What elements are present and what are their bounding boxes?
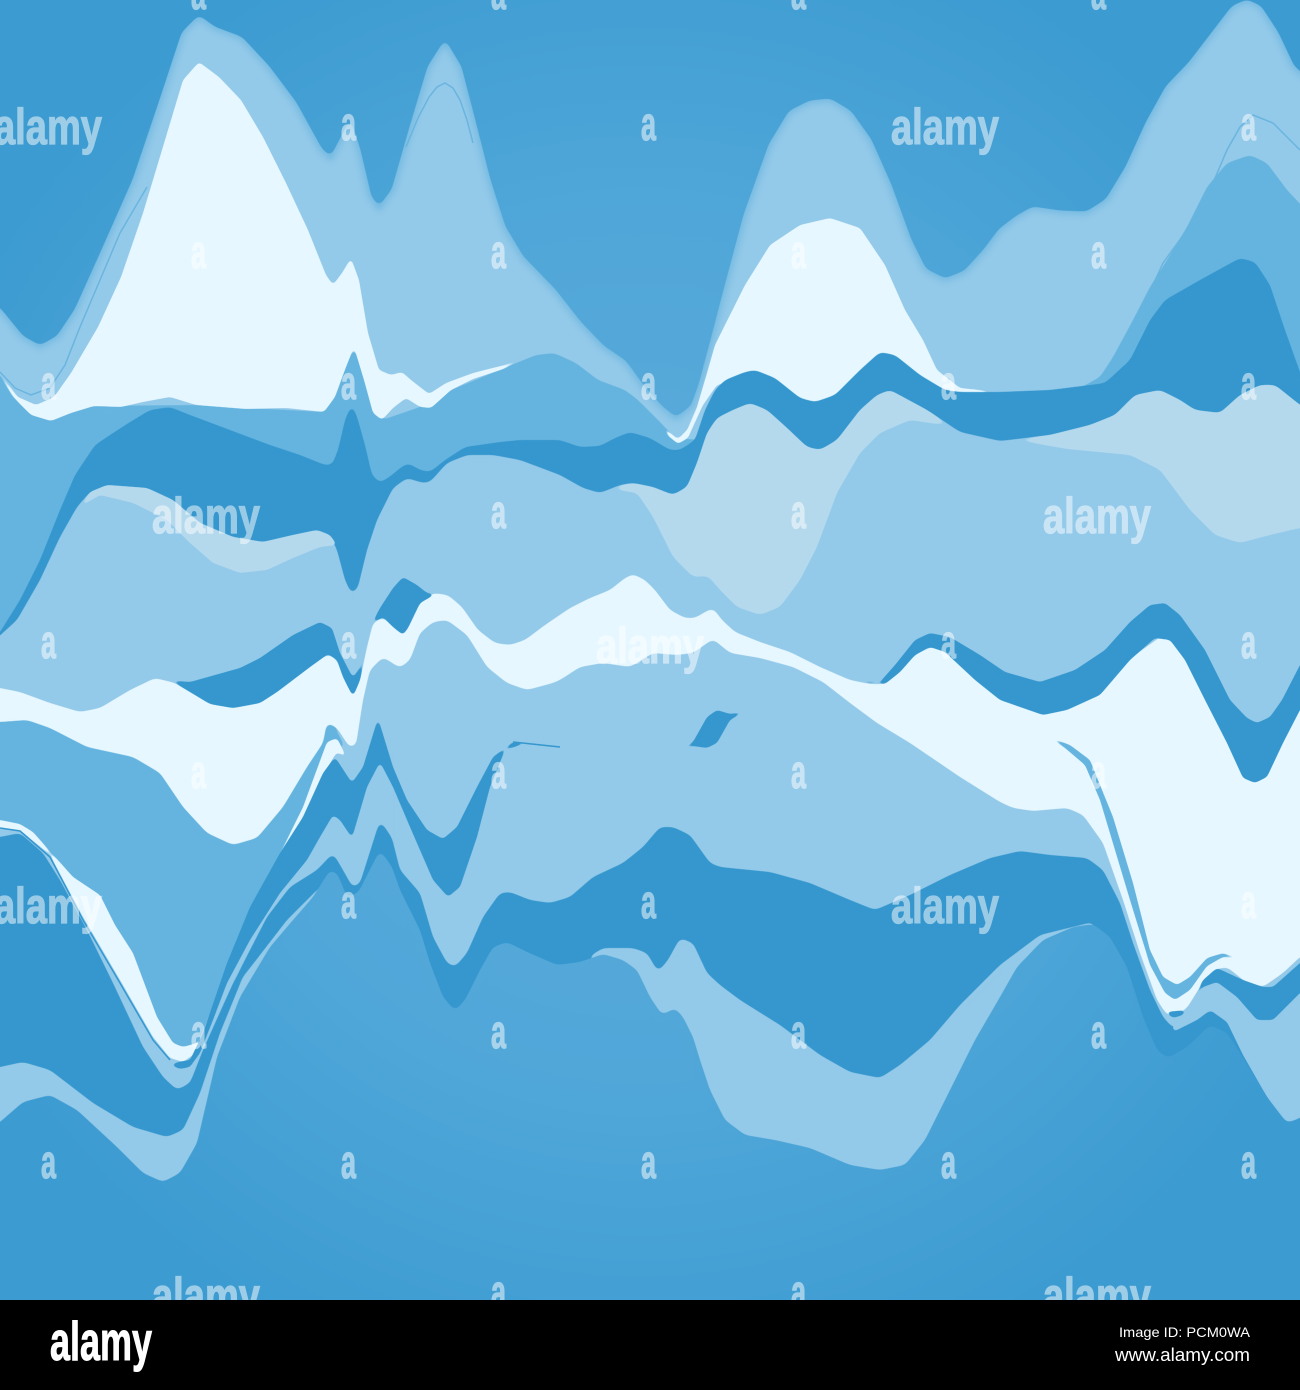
watermark grid: a — [341, 356, 356, 409]
thin white strip lower left — [0, 738, 347, 1062]
watermark grid: a — [191, 225, 206, 278]
watermark grid: a — [641, 875, 656, 928]
watermark grid: a — [491, 1005, 506, 1058]
watermark grid: alamy — [152, 488, 260, 544]
watermark grid: a — [1241, 1135, 1256, 1188]
watermark grid: a — [1091, 745, 1106, 798]
watermark grid: a — [941, 615, 956, 668]
dark diagonal strand — [170, 718, 530, 1069]
watermark grid: a — [641, 97, 656, 150]
watermark grid: a — [341, 875, 356, 928]
watermark grid: a — [791, 485, 806, 538]
light strip lower left — [0, 718, 395, 1200]
watermark grid: alamy — [596, 618, 704, 674]
watermark grid: a — [791, 225, 806, 278]
watermark grid: a — [1241, 615, 1256, 668]
watermark grid: a — [791, 745, 806, 798]
light lobe lower centre — [590, 922, 1110, 1220]
mid blue upper band — [0, 155, 1300, 680]
watermark grid: a — [341, 1135, 356, 1188]
watermark grid: a — [941, 1135, 956, 1188]
watermark grid: a — [941, 356, 956, 409]
watermark grid: a — [1241, 356, 1256, 409]
watermark grid: alamy — [152, 1268, 260, 1324]
watermark grid: alamy — [891, 99, 999, 155]
pale blue lobe right — [610, 385, 1300, 615]
black footer bar — [0, 1300, 1300, 1390]
light lobe lower right — [1173, 975, 1300, 1125]
thin dark lines — [0, 742, 560, 1060]
watermark grid: a — [41, 356, 56, 409]
footer logo: alamy — [50, 1310, 152, 1372]
image id: Image ID: PCM0WA — [1119, 1324, 1251, 1340]
watermark grid: a — [491, 225, 506, 278]
watermark grid: alamy — [891, 878, 999, 934]
watermark grid: a — [641, 356, 656, 409]
upper light wave — [0, 1, 1300, 520]
watermark grid: a — [491, 745, 506, 798]
mid blue lower left area — [0, 700, 350, 1055]
bottom background wave — [0, 850, 1300, 1320]
watermark grid: a — [491, 485, 506, 538]
watermark grid: a — [191, 1005, 206, 1058]
dark ribbon lower right — [1165, 945, 1300, 1020]
watermark grid: a — [341, 97, 356, 150]
watermark grid: a — [641, 1135, 656, 1188]
watermark grid: a — [791, 1005, 806, 1058]
thin contour lines in upper wave — [0, 83, 1300, 395]
watermark grid: alamy — [1043, 488, 1151, 544]
white ribbon — [0, 574, 1300, 1015]
watermark grid: a — [1091, 225, 1106, 278]
watermark grid: a — [1241, 875, 1256, 928]
dark lower wave — [0, 820, 1300, 1230]
dark ribbon right — [815, 603, 1300, 783]
watermark grid: a — [491, 1265, 506, 1318]
watermark grid: a — [41, 1135, 56, 1188]
watermark grid: a — [41, 615, 56, 668]
watermark grid: a — [341, 615, 356, 668]
watermark grid: a — [191, 745, 206, 798]
mid blue strand right — [1045, 735, 1250, 1000]
large light blue middle band — [0, 385, 1300, 1320]
watermark grid: a — [1091, 1005, 1106, 1058]
website: www.alamy.com — [1114, 1345, 1250, 1365]
watermark grid: alamy — [1043, 1268, 1151, 1324]
small dark fleck — [678, 710, 746, 751]
watermark grid: a — [791, 1265, 806, 1318]
dark ribbon left — [165, 577, 436, 708]
white peak right — [645, 218, 1000, 444]
watermark grid: a — [1241, 97, 1256, 150]
dark blue band — [0, 258, 1300, 720]
white peak left — [0, 62, 536, 421]
pale sliver left — [80, 485, 337, 573]
